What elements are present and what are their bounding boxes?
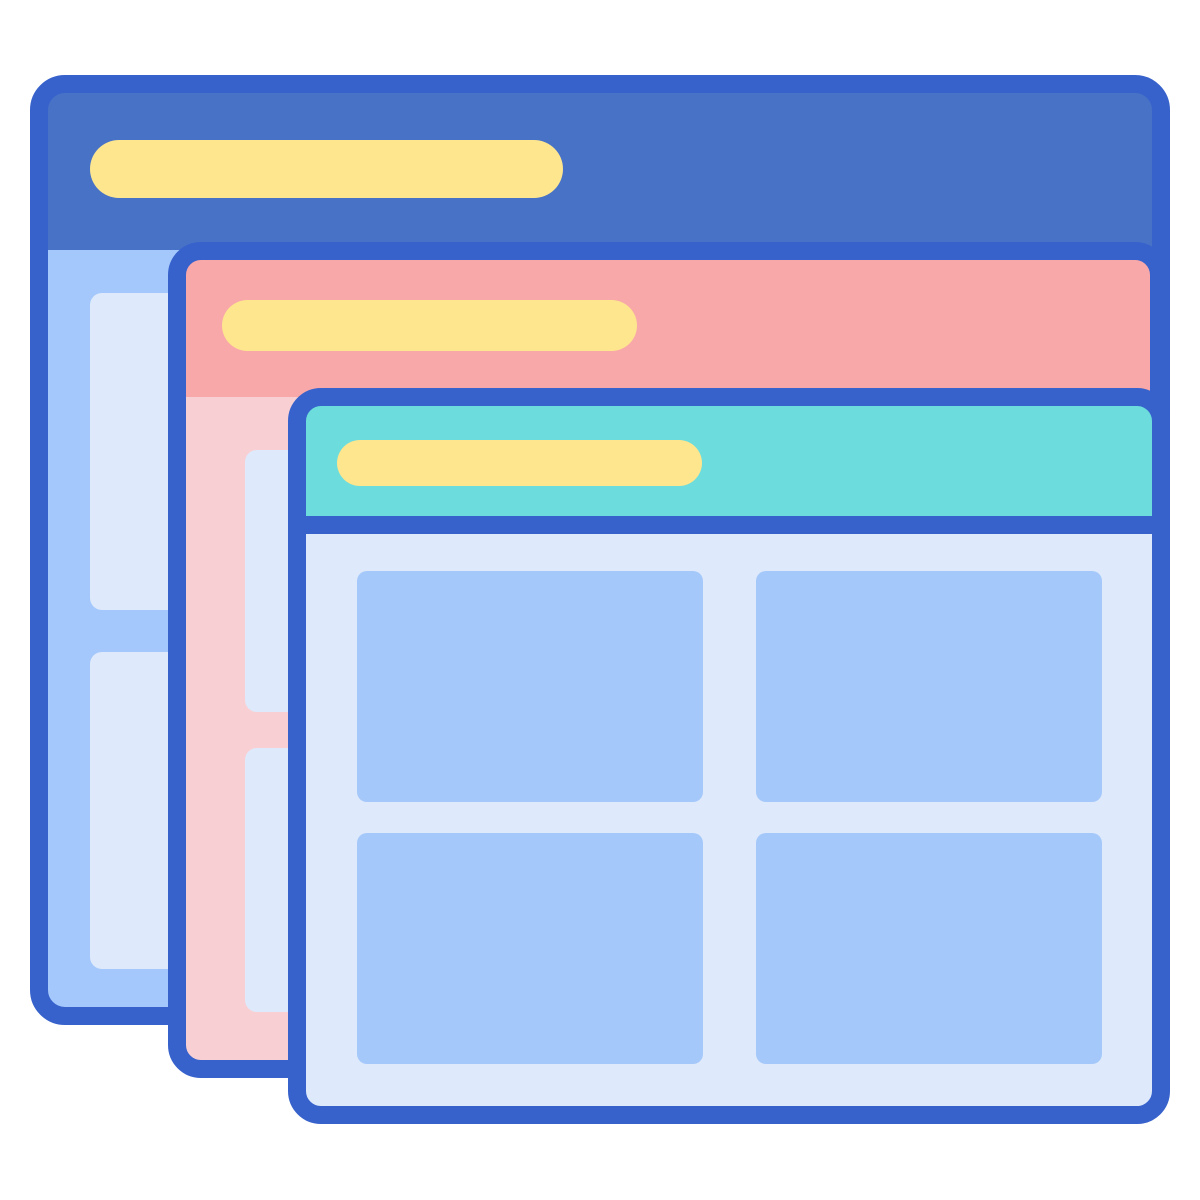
panel: back window [39, 84, 1161, 1016]
panel: front window [297, 397, 1161, 1115]
panel: middle window [177, 251, 1159, 1069]
